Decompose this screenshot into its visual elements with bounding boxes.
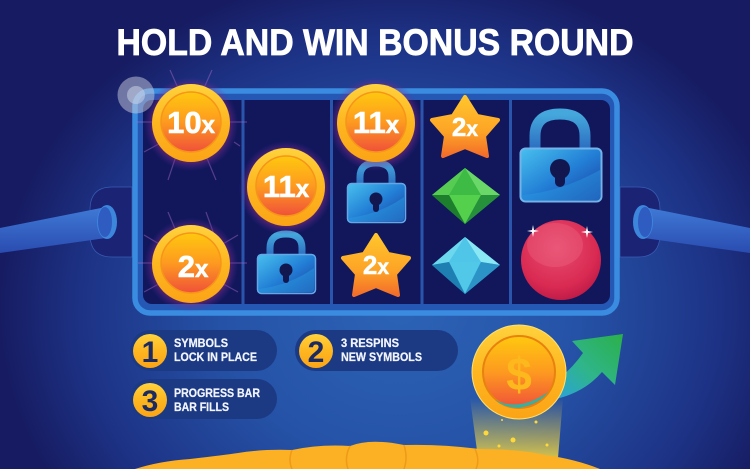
- big dollar coin: [472, 325, 566, 419]
- grey touch indicator: [118, 76, 154, 114]
- ball: red: [521, 220, 601, 300]
- star: 2x column 4: 2x: [452, 112, 478, 142]
- panel: slot machine frame: [135, 91, 617, 313]
- step 2 pill: [295, 330, 458, 371]
- lock: column 3: [348, 163, 406, 222]
- star: 2x column 3: 2x: [363, 250, 389, 280]
- step 2 pill: 3 RESPINS: [341, 336, 399, 350]
- step 3 pill: [130, 379, 277, 419]
- step 1 pill: LOCK IN PLACE: [174, 350, 257, 364]
- coin: 11x column 3: [329, 77, 423, 171]
- coin: 10x: 10x: [167, 105, 216, 140]
- arrow: growth: [556, 334, 623, 399]
- light beam with sparkles: [470, 398, 563, 458]
- gold pile: [135, 442, 600, 469]
- title: HOLD AND WIN BONUS ROUND: [116, 22, 634, 63]
- coin: 11x column 2: 11x: [263, 169, 310, 204]
- star: 2x column 4: [432, 97, 498, 156]
- coin: 2x: [144, 218, 238, 312]
- coin: 11x column 3: 11x: [353, 105, 400, 140]
- gem: blue: [432, 237, 500, 294]
- step 3 pill: PROGRESS BAR: [174, 386, 260, 400]
- lock: column 2: [258, 234, 316, 294]
- coin: 11x column 2: [239, 141, 333, 235]
- lock: large: [520, 114, 602, 202]
- big dollar coin: $: [506, 348, 532, 400]
- step 1 pill: 1: [142, 336, 158, 369]
- step 2 pill: 2: [308, 336, 324, 369]
- coin glow rays: [136, 70, 247, 292]
- star: 2x column 3: [343, 235, 409, 295]
- step 2 pill: NEW SYMBOLS: [341, 350, 422, 364]
- right axle: [620, 187, 750, 257]
- coin: 2x: 2x: [178, 249, 209, 284]
- step 3 pill: 3: [142, 385, 158, 418]
- coin: 10x: [144, 77, 238, 171]
- gem: green: [432, 168, 500, 224]
- step 1 pill: SYMBOLS: [174, 336, 228, 350]
- left axle: [0, 187, 132, 257]
- step 1 pill: [130, 330, 277, 371]
- step 3 pill: BAR FILLS: [174, 400, 229, 414]
